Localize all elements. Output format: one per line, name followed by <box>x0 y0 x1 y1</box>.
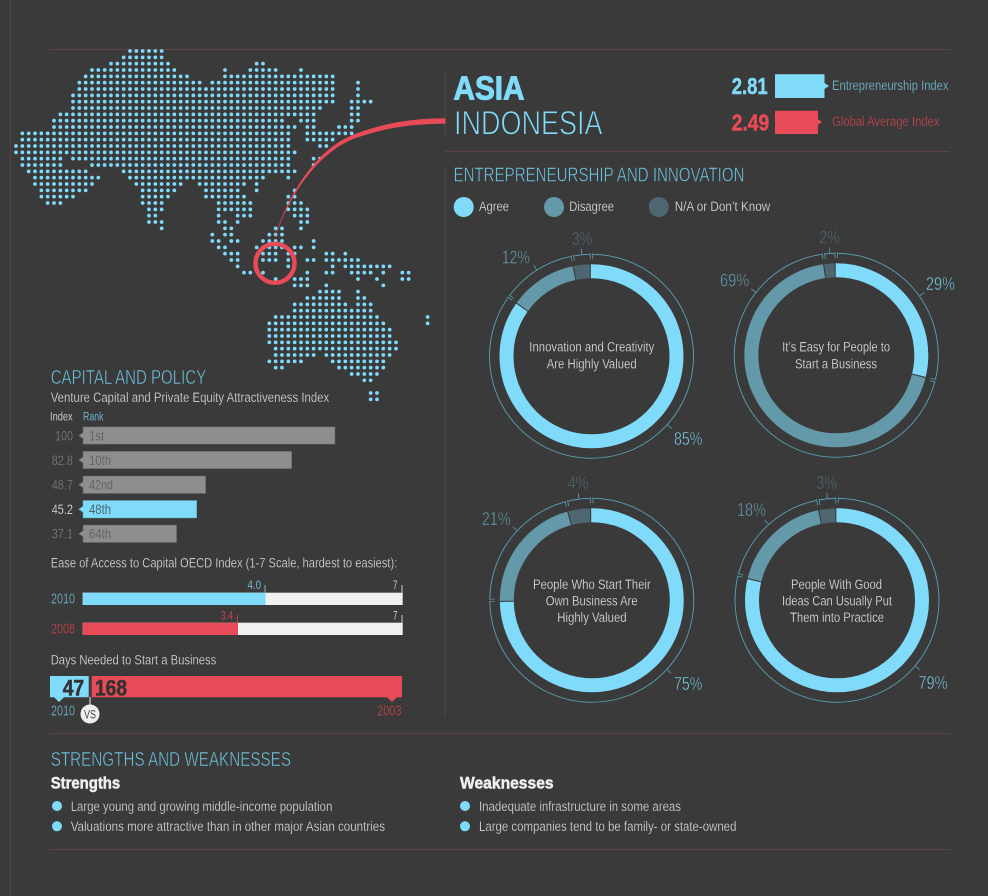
bar: 2008 <box>51 610 403 638</box>
column headers <box>50 412 104 424</box>
bullet: infrastructure: Inadequate infrastructure in some areas <box>479 799 681 814</box>
bar: 47 days in 2010 <box>50 675 89 720</box>
donut chart: people who start their own business: Own Business Are <box>546 594 638 609</box>
bar: rank 64th <box>52 525 177 542</box>
donut chart: innovation and creativity: Innovation and Creativity <box>529 340 655 355</box>
heading: entrepreneurship and innovation: ENTREPRENEURSHIP AND INNOVATION <box>454 165 744 187</box>
arrow: tapered red arc from heading to Indonesia <box>275 118 446 237</box>
donut chart: people who start their own business: Highly Valued <box>557 610 627 625</box>
donut chart: easy to start a business: It’s Easy for People to <box>782 340 890 355</box>
legend <box>454 197 770 217</box>
panel: weaknesses <box>460 773 736 834</box>
bar: rank 42nd <box>52 476 206 494</box>
bar: 168 days in 2003: 2003 <box>377 703 402 720</box>
title: Asia Indonesia <box>454 70 603 143</box>
global average index: Global Average Index <box>832 114 940 129</box>
bar: 168 days in 2003: 168 <box>95 675 127 700</box>
bullet: family-owned companies: Large companies tend to be family- or state-owned <box>479 819 736 834</box>
title: Asia Indonesia: INDONESIA <box>454 105 603 143</box>
bar: 2008: 2008 <box>51 621 75 638</box>
title: Asia Indonesia: ASIA <box>454 70 524 107</box>
chart title: Venture Capital and Private Equity Attractiveness Index <box>51 390 329 405</box>
bar: 2010: 7 <box>393 580 398 592</box>
donut chart: innovation and creativity: 3% <box>572 229 592 249</box>
donut chart: people who start their own business: 21% <box>482 509 511 529</box>
bar: rank 10th: 82.8 <box>52 452 73 468</box>
bar: rank 1st: 1st <box>89 427 104 443</box>
bar: rank 48th highlighted: 45.2 <box>52 501 73 517</box>
bar: 2010: 4.0 <box>248 580 261 592</box>
legend: Agree <box>479 199 509 214</box>
bar: rank 10th: 10th <box>89 452 111 468</box>
bar: 2008: 3.4 <box>221 610 234 622</box>
bar: rank 1st: 100 <box>55 427 73 443</box>
badge: versus <box>80 697 100 724</box>
legend: Disagree <box>569 199 614 214</box>
chart title: Ease of Access to Capital OECD Index (1-7 Scale, hardest to easiest): <box>51 556 397 571</box>
donut chart: people with good ideas: 18% <box>737 500 766 520</box>
bar: 47 days in 2010: 2010 <box>51 703 75 720</box>
bar: 2010: 2010 <box>51 591 75 608</box>
global average index: 2.49 <box>732 110 769 136</box>
donut chart: people with good ideas: Ideas Can Usually Put <box>782 594 892 609</box>
badge: versus: VS <box>84 707 96 721</box>
column headers: Rank <box>83 412 104 424</box>
donut chart: people with good ideas: People With Good <box>791 577 882 592</box>
panel: strengths <box>51 773 385 834</box>
bar: rank 10th <box>52 451 292 469</box>
bullet: valuations: Valuations more attractive than in other major Asian countries <box>71 819 385 834</box>
legend: N/A or Don’t Know <box>675 199 770 214</box>
donut chart: people who start their own business <box>482 473 702 702</box>
chart title: Days Needed to Start a Business <box>51 652 216 667</box>
bar: 168 days in 2003 <box>92 675 402 720</box>
donut chart: people with good ideas: 3% <box>816 473 837 493</box>
bar: rank 1st <box>55 427 335 444</box>
bullet: young population: Large young and growing middle-income population <box>71 799 332 814</box>
bar chart: ease of access to capital <box>51 556 403 638</box>
donut chart: people with good ideas: 79% <box>918 673 948 693</box>
icon: red circle marking Indonesia <box>256 244 294 283</box>
heading: capital and policy: CAPITAL AND POLICY <box>51 367 206 389</box>
donut chart: easy to start a business: Start a Business <box>795 356 877 371</box>
bar: rank 48th highlighted: 48th <box>89 501 111 517</box>
bar: 47 days in 2010: 47 <box>63 675 84 700</box>
bar chart: venture capital attractiveness <box>50 390 335 542</box>
donut chart: people who start their own business: 4% <box>568 473 588 493</box>
bar: rank 42nd: 42nd <box>89 476 113 492</box>
donut chart: easy to start a business: 2% <box>819 227 840 247</box>
global average index <box>732 110 940 136</box>
panel: index comparison <box>732 73 949 136</box>
donut chart: innovation and creativity: 85% <box>674 429 702 449</box>
heading: strengths and weaknesses: STRENGTHS AND WEAKNESSES <box>51 749 291 771</box>
donut chart: innovation and creativity: Are Highly Valued <box>547 356 637 371</box>
bar: rank 42nd: 48.7 <box>52 476 73 492</box>
panel: weaknesses: Weaknesses <box>460 773 554 792</box>
donut chart: innovation and creativity <box>490 229 702 458</box>
bar: 2010 <box>51 580 403 608</box>
entrepreneurship index: 2.81 <box>732 73 768 99</box>
donut chart: people who start their own business: 75% <box>674 674 702 694</box>
entrepreneurship index <box>732 73 949 99</box>
donut chart: easy to start a business: 29% <box>926 274 955 294</box>
entrepreneurship index: Entrepreneurship Index <box>832 78 949 93</box>
donut chart: easy to start a business: 69% <box>720 271 749 291</box>
donut chart: easy to start a business <box>720 227 955 457</box>
donut chart: people who start their own business: People Who Start Their <box>533 577 651 592</box>
bar chart: days needed to start a business <box>50 652 402 724</box>
panel: strengths: Strengths <box>51 773 120 792</box>
donut chart: innovation and creativity: 12% <box>502 247 530 267</box>
column headers: Index <box>50 412 73 424</box>
bar: rank 64th: 64th <box>89 526 111 542</box>
map: dotted Asia-Pacific <box>16 51 428 399</box>
donut chart: people with good ideas <box>735 473 948 702</box>
bar: rank 48th highlighted <box>52 500 197 518</box>
bar: 2008: 7 <box>393 610 398 622</box>
bar: rank 64th: 37.1 <box>52 526 73 542</box>
donut chart: people with good ideas: Them into Practice <box>790 610 884 625</box>
